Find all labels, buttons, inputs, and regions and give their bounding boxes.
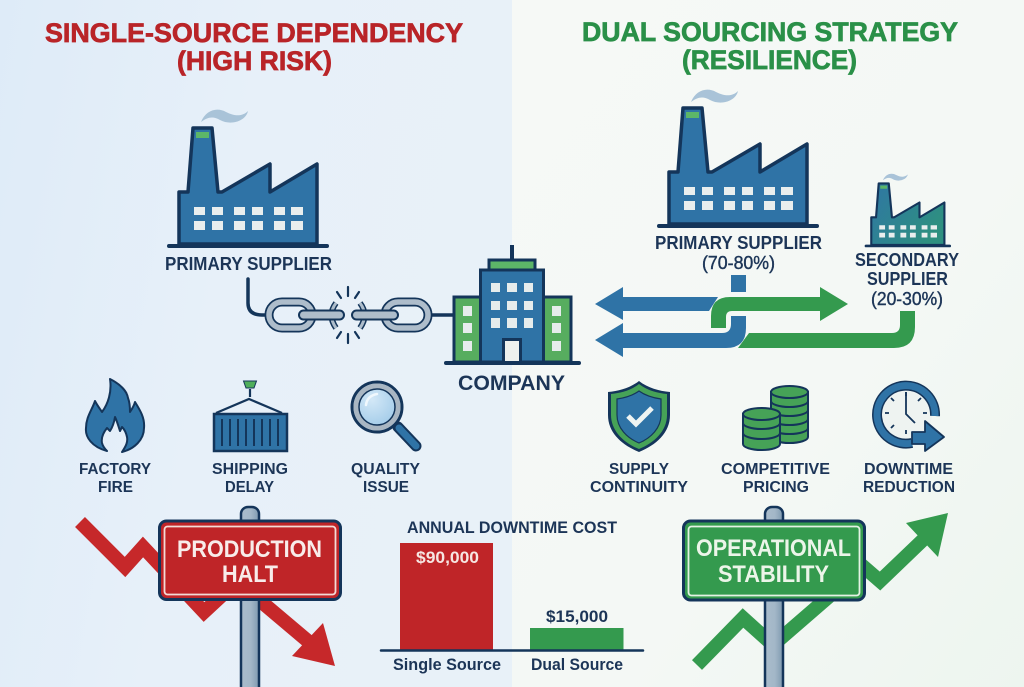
icon: clock with arrow — [877, 386, 944, 451]
label: secondary supplier share: SUPPLIER — [867, 269, 948, 289]
bar chart: annual downtime cost — [381, 518, 643, 674]
label: secondary supplier share — [855, 250, 959, 309]
label: quality issue: ISSUE — [363, 479, 409, 496]
sign: production halt: PRODUCTION — [177, 536, 322, 563]
arrow: blue upper to company — [595, 287, 718, 320]
label: primary supplier share: PRIMARY SUPPLIER — [655, 233, 822, 253]
arrow: rising green trend — [697, 513, 948, 665]
sign: production halt — [160, 507, 340, 687]
title: dual sourcing strategy: DUAL SOURCING STRATEGY — [582, 17, 958, 47]
arrow: green lower from secondary — [738, 311, 915, 348]
label: competitive pricing — [721, 461, 830, 496]
label: secondary supplier share: (20-30%) — [871, 289, 943, 309]
value: single source: $90,000 — [416, 548, 479, 567]
label: primary supplier share — [655, 233, 822, 273]
title: dual sourcing strategy: (RESILIENCE) — [682, 45, 857, 75]
label: supply continuity — [590, 461, 688, 496]
label: primary supplier (left): PRIMARY SUPPLIER — [165, 254, 332, 274]
label: primary supplier share: (70-80%) — [702, 253, 775, 273]
label: competitive pricing: COMPETITIVE — [721, 461, 830, 478]
label: downtime reduction: REDUCTION — [863, 479, 955, 496]
broken chain link connection — [248, 279, 456, 343]
background: right panel — [512, 0, 1024, 687]
icon: shipping container — [214, 381, 287, 451]
value: dual source: $15,000 — [546, 607, 608, 626]
chart title: ANNUAL DOWNTIME COST — [407, 518, 618, 537]
label: supply continuity: SUPPLY — [609, 461, 669, 478]
arrow: primary stub — [731, 275, 746, 292]
arrow: green upper to secondary side — [711, 287, 848, 328]
title: single-source dependency: (HIGH RISK) — [177, 46, 332, 76]
label: quality issue — [351, 461, 420, 496]
axis label: single source: Single Source — [393, 655, 501, 674]
title: single-source dependency: SINGLE-SOURCE DEPENDENCY — [45, 18, 463, 48]
icon: primary supplier factory (left) — [169, 110, 327, 246]
icon: secondary supplier factory — [866, 174, 950, 246]
sign: operational stability: OPERATIONAL — [696, 535, 851, 562]
axis label: dual source: Dual Source — [531, 655, 623, 674]
label: downtime reduction — [863, 461, 955, 496]
label: quality issue: QUALITY — [351, 461, 420, 478]
arrow: blue lower to company — [595, 316, 746, 357]
label: supply continuity: CONTINUITY — [590, 479, 688, 496]
arrow: falling red trend — [80, 522, 335, 666]
label: competitive pricing: PRICING — [743, 479, 809, 496]
title: dual sourcing strategy — [582, 17, 958, 75]
sign: production halt: HALT — [222, 561, 278, 588]
icon: factory fire — [86, 379, 144, 452]
icon: company building — [446, 245, 579, 363]
label: shipping delay — [212, 461, 288, 496]
label: secondary supplier share: SECONDARY — [855, 250, 959, 270]
label: factory fire: FACTORY — [79, 461, 151, 478]
icon: shield with check — [608, 381, 670, 452]
background: left panel — [0, 0, 512, 687]
label: factory fire — [79, 461, 151, 496]
label: company: COMPANY — [458, 372, 565, 395]
sign: operational stability: STABILITY — [718, 561, 829, 588]
label: shipping delay: SHIPPING — [212, 461, 288, 478]
bar: dual source — [530, 628, 624, 650]
label: downtime reduction: DOWNTIME — [864, 461, 953, 478]
label: shipping delay: DELAY — [225, 479, 274, 496]
title: single-source dependency — [45, 18, 463, 76]
bar: single source — [400, 543, 493, 650]
icon: coin stacks — [743, 386, 808, 450]
icon: primary supplier factory (right) — [659, 90, 817, 226]
label: factory fire: FIRE — [98, 479, 133, 496]
icon: magnifying glass — [352, 382, 416, 446]
dual supply flow arrows — [595, 275, 915, 357]
sign: operational stability — [684, 507, 864, 687]
